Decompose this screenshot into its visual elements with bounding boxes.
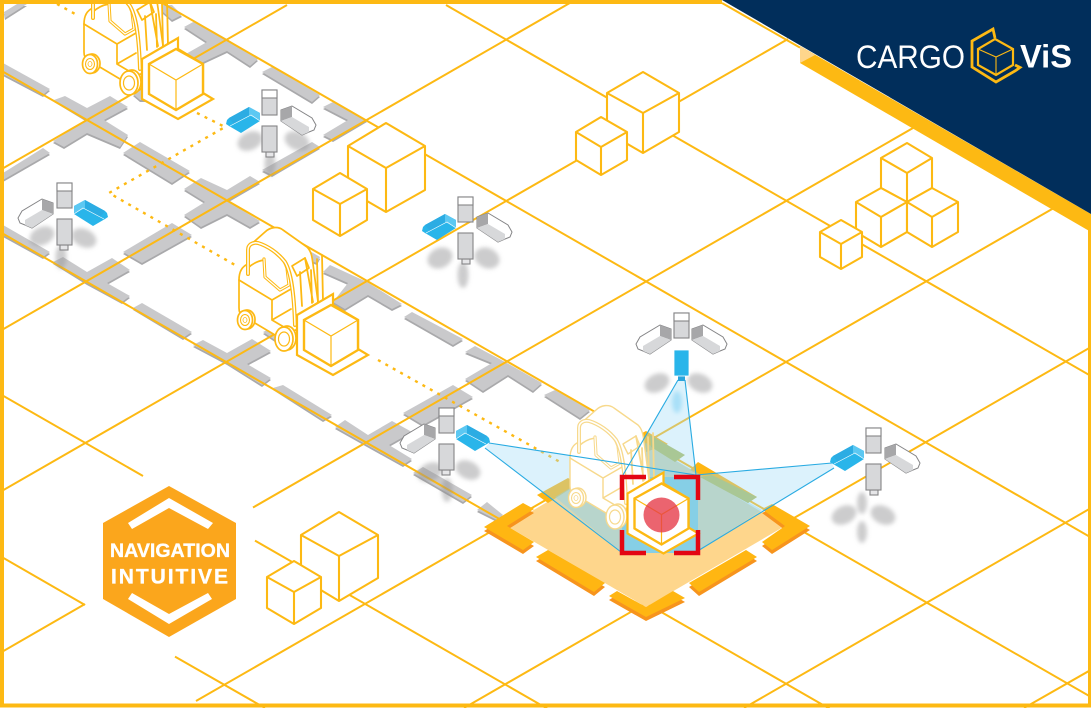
cube: top centre small: [576, 117, 627, 175]
cube: top left stack small: [313, 173, 367, 236]
forklift: middle: [238, 228, 368, 375]
cube: top left stack large: [348, 123, 425, 212]
yellow ribbon under logo banner: [800, 46, 1091, 232]
cube pile: right: [820, 143, 958, 269]
dotted route lines: [57, 4, 560, 462]
badge: navigation intuitive: INTUITIVE: [111, 566, 228, 588]
camera cluster: above target: [636, 313, 727, 413]
camera cluster: right of target: [828, 428, 920, 543]
cube: bottom left small: [267, 561, 321, 624]
detected load with target marker: [628, 472, 698, 554]
target zone pad: [484, 431, 810, 621]
detection field: camera cones: [485, 380, 834, 553]
cube: top centre large: [607, 72, 679, 153]
camera cluster: left: [18, 183, 108, 269]
warehouse floor markings: [3, 4, 590, 522]
camera cluster: top road: [226, 90, 316, 176]
camera cluster: centre: [422, 197, 512, 288]
badge: navigation intuitive: [103, 486, 236, 637]
red target brackets: [622, 477, 698, 553]
forklift: detected, faded: [568, 406, 654, 529]
logo banner: [722, 0, 1091, 214]
camera cluster: left of target: [400, 408, 490, 502]
cube: bottom left large: [301, 512, 378, 601]
forklift: top: [82, 0, 213, 119]
badge: navigation intuitive: NAVIGATION: [110, 540, 230, 562]
logo banner: ViS: [1020, 38, 1072, 74]
camera cone edges: [485, 380, 834, 552]
logo banner: CARGO: [856, 39, 965, 75]
